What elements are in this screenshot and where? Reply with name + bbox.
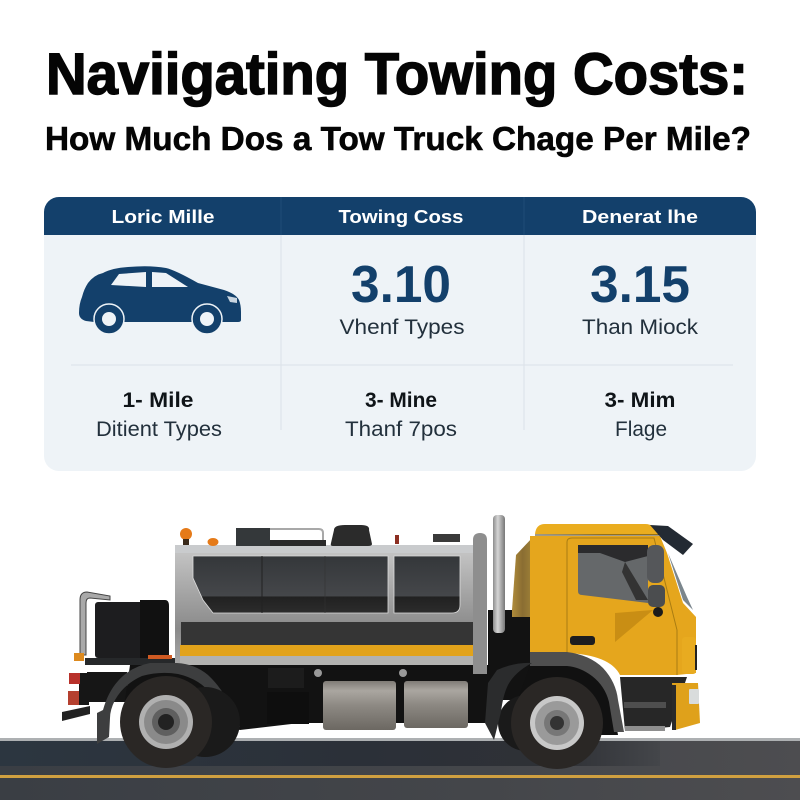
row 2 value: 3-Mine: 3- Mine <box>365 389 437 412</box>
row 2 label: Flage: Flage <box>615 418 667 441</box>
truck: rear equipment <box>62 592 177 721</box>
truck: cab window <box>578 545 648 603</box>
table header bar <box>44 197 756 235</box>
truck: ribbed cab side <box>512 537 533 617</box>
tow truck <box>62 515 700 769</box>
truck: body windows <box>193 556 460 613</box>
truck: cab <box>512 524 697 675</box>
value: 3.10: 3.10 <box>351 256 451 314</box>
label: Than Miock: Than Miock <box>582 316 699 339</box>
truck: middle fender <box>485 663 532 740</box>
panel: cost table <box>44 197 756 471</box>
row 2 value: 1-Mile: 1- Mile <box>122 389 194 412</box>
truck: front fender and step <box>505 652 700 735</box>
title: Naviigating Towing Costs: <box>46 42 748 107</box>
subtitle: How Much Dos a Tow Truck Chage Per Mile? <box>45 120 751 157</box>
truck: chassis <box>125 610 530 730</box>
label: Vhenf Types: Vhenf Types <box>340 316 464 339</box>
value: 3.15: 3.15 <box>590 256 690 314</box>
row 2 label: Ditient Types: Ditient Types <box>96 418 222 441</box>
row 2 value: 3-Mim: 3- Mim <box>604 389 676 412</box>
truck: roof equipment <box>180 525 460 546</box>
icon: car <box>79 266 241 334</box>
truck: pipes <box>473 515 505 674</box>
truck: rear wheel <box>120 676 240 768</box>
truck: rear fender <box>97 663 240 744</box>
truck: tanker body <box>175 545 477 665</box>
road <box>0 738 800 800</box>
truck: dark stripe <box>181 622 477 645</box>
header: column 1: Loric Mille <box>112 207 214 227</box>
header: column 2: Towing Coss <box>338 207 464 227</box>
truck: front wheel <box>498 677 603 769</box>
header: column 3: Denerat lhe <box>582 207 698 227</box>
truck: fuel tanks <box>267 668 468 730</box>
truck: yellow stripe <box>180 645 477 656</box>
row 2 label: Thanf Tpos: Thanf 7pos <box>345 418 457 441</box>
